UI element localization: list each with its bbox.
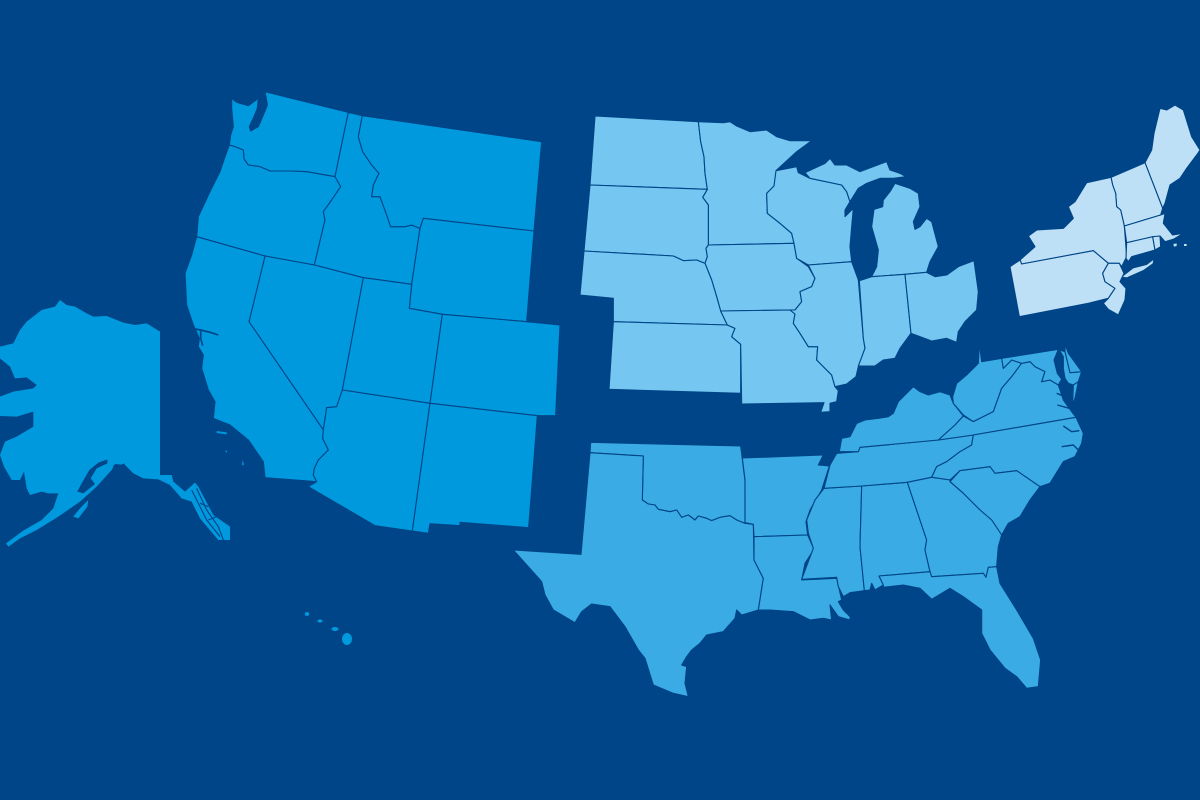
state: Indiana <box>858 274 911 366</box>
region: West <box>185 92 560 533</box>
region: Midwest <box>580 116 978 412</box>
state: Illinois <box>790 262 865 387</box>
state: Tennessee <box>824 435 973 488</box>
state: Virginia <box>938 362 1076 440</box>
state: Michigan <box>805 158 938 277</box>
southeast states <box>802 343 1083 688</box>
state: Minnesota <box>698 122 812 245</box>
state: Hawaii <box>305 612 352 645</box>
state: Arizona <box>308 390 430 531</box>
Long Island <box>1123 260 1153 277</box>
state: Georgia <box>907 477 1002 577</box>
state: Alaska <box>0 300 230 547</box>
region: Northeast <box>1010 105 1200 317</box>
state: Massachusetts <box>1124 213 1183 243</box>
state: Arkansas <box>742 455 829 537</box>
state: Nebraska <box>580 251 727 325</box>
state: Kansas <box>609 322 741 393</box>
state: North Dakota <box>590 116 707 189</box>
state: Oregon <box>197 145 341 265</box>
states: Vermont and New Hampshire <box>1111 163 1163 226</box>
San Francisco Bay <box>195 329 218 346</box>
state: North Carolina <box>932 417 1083 487</box>
state: Rhode Island <box>1153 236 1161 250</box>
state: Texas <box>513 453 763 697</box>
state: Florida <box>879 567 1041 688</box>
Channel Islands <box>217 431 244 466</box>
state: Mississippi <box>802 486 864 597</box>
state: Wyoming <box>409 218 534 322</box>
islands: Nantucket and Martha's Vineyard <box>1173 243 1187 247</box>
state: Maine <box>1145 105 1200 208</box>
state: Colorado <box>430 314 560 416</box>
state: Pennsylvania <box>1010 251 1115 317</box>
state: New Jersey <box>1103 263 1126 315</box>
state: South Carolina <box>950 467 1040 535</box>
state: Iowa <box>705 243 815 311</box>
state: Louisiana <box>754 535 850 620</box>
state: California <box>185 237 328 482</box>
state: Maryland <box>1002 349 1082 385</box>
state: Wisconsin <box>767 167 853 265</box>
state: Idaho <box>314 112 420 284</box>
state: Montana <box>358 116 542 231</box>
south central states <box>513 442 850 697</box>
state: Ohio <box>905 261 978 342</box>
region: South <box>513 343 1083 697</box>
Virginia eastern shore <box>1073 382 1078 405</box>
state: Connecticut <box>1126 237 1155 262</box>
state: Kentucky <box>839 387 963 452</box>
state: South Dakota <box>584 185 708 263</box>
state: New York <box>1020 177 1127 267</box>
state: Oklahoma <box>590 442 745 523</box>
state: Utah <box>342 278 442 403</box>
state: New Mexico <box>412 403 537 533</box>
region: Alaska and Hawaii <box>0 300 352 645</box>
state: West Virginia <box>953 343 1022 422</box>
state: Delaware <box>1065 344 1082 373</box>
state: Missouri <box>721 310 838 412</box>
state: Washington <box>229 92 348 177</box>
state: Nevada <box>249 256 363 430</box>
state: Alabama <box>860 482 930 591</box>
coastal inlets of Virginia and North Carolina <box>1057 393 1079 450</box>
